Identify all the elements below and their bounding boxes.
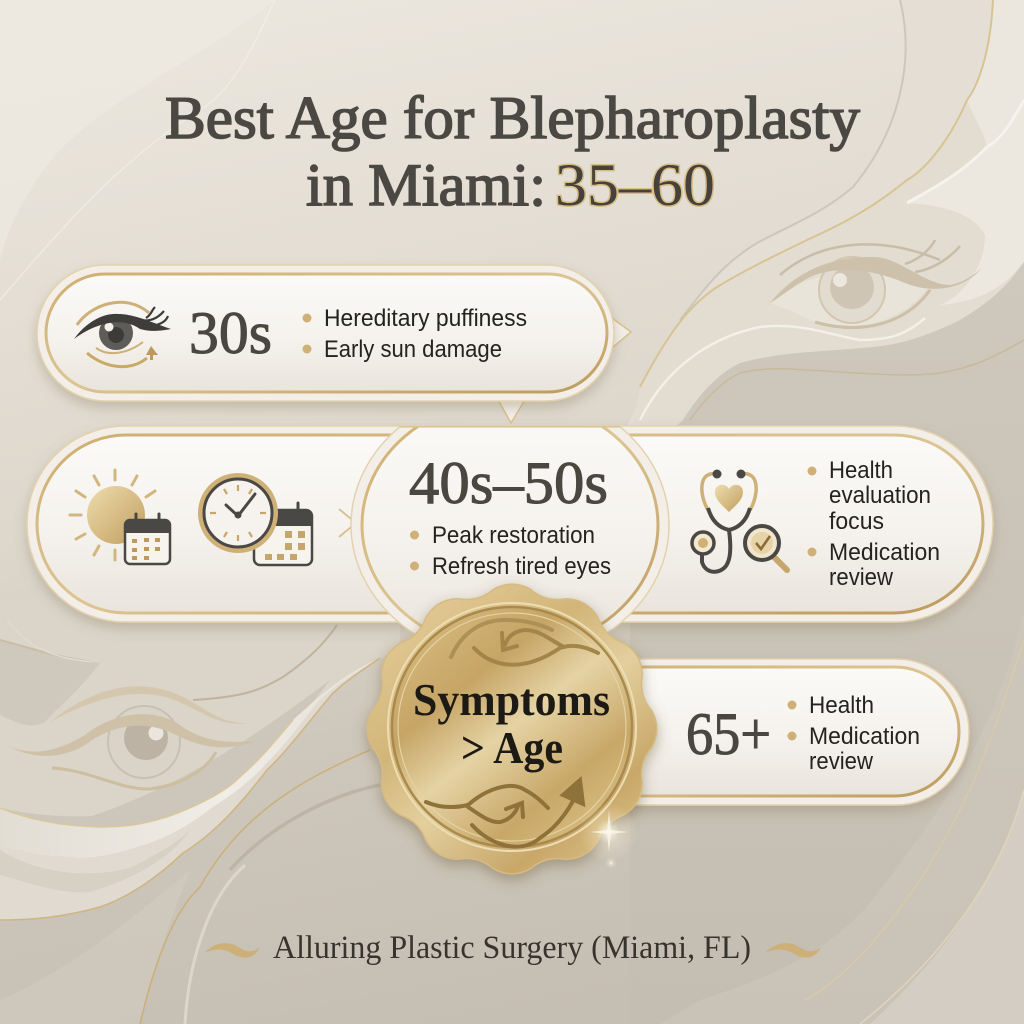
- icon: sun with calendar: [70, 470, 170, 564]
- seal ornament: bottom swirl arrow: [426, 780, 583, 847]
- list: health evaluation: Medication: [829, 539, 940, 566]
- list: 65+ factors: [788, 692, 920, 775]
- list: 40s-50s benefits: [410, 522, 611, 580]
- panel: 65+ pill: [500, 659, 969, 805]
- title: in Miami:: [306, 152, 546, 218]
- list: health evaluation: Health: [829, 457, 893, 484]
- seal ornament: top swirl arrow: [451, 620, 598, 665]
- age label: 65+: 65+: [686, 701, 771, 767]
- panel: 40s-50s center highlight: [350, 426, 670, 634]
- decorative eye: bottom left: [0, 686, 260, 789]
- list: 65+ factors: Medication: [809, 723, 920, 750]
- list: 40s-50s benefits: Refresh tired eyes: [432, 553, 611, 580]
- icon: eye with lift arrow: [74, 302, 171, 367]
- ornament: right swirl: [765, 943, 821, 958]
- badge: symptoms over age gold seal: [367, 584, 657, 874]
- list: 65+ factors: review: [809, 748, 874, 775]
- list: 30s factors: Early sun damage: [324, 336, 502, 363]
- list: 65+ factors: Health: [809, 692, 874, 719]
- list: 30s factors: [302, 305, 527, 363]
- icon: stethoscope with magnifier: [692, 470, 787, 572]
- footer: attribution: Alluring Plastic Surgery (Miami, FL): [273, 930, 751, 966]
- icon: clock with calendar: [198, 473, 312, 565]
- seal sparkle: [578, 802, 638, 869]
- list: health evaluation: review: [829, 564, 894, 591]
- list: health evaluation: [808, 457, 940, 591]
- title: Best Age for Blepharoplasty: [165, 85, 860, 151]
- title: 35–60: [555, 152, 715, 218]
- list: 40s-50s benefits: Peak restoration: [432, 522, 595, 549]
- seal text: Symptoms: [413, 674, 610, 725]
- panel: 40s-50s row pill: [27, 426, 993, 622]
- decorative eye: top right: [770, 240, 982, 327]
- list: 30s factors: Hereditary puffiness: [324, 305, 527, 332]
- age label: 40s-50s: 40s–50s: [409, 450, 608, 516]
- arrow: chevron to center: [339, 509, 356, 537]
- ornament: left swirl: [204, 943, 260, 958]
- panel: 30s pill: [37, 265, 631, 423]
- badge: symptoms over age gold seal: > Age: [461, 722, 563, 773]
- age label: 30s: 30s: [189, 300, 272, 366]
- list: health evaluation: evaluation: [829, 482, 931, 509]
- title: [165, 85, 860, 218]
- list: health evaluation: focus: [829, 508, 884, 535]
